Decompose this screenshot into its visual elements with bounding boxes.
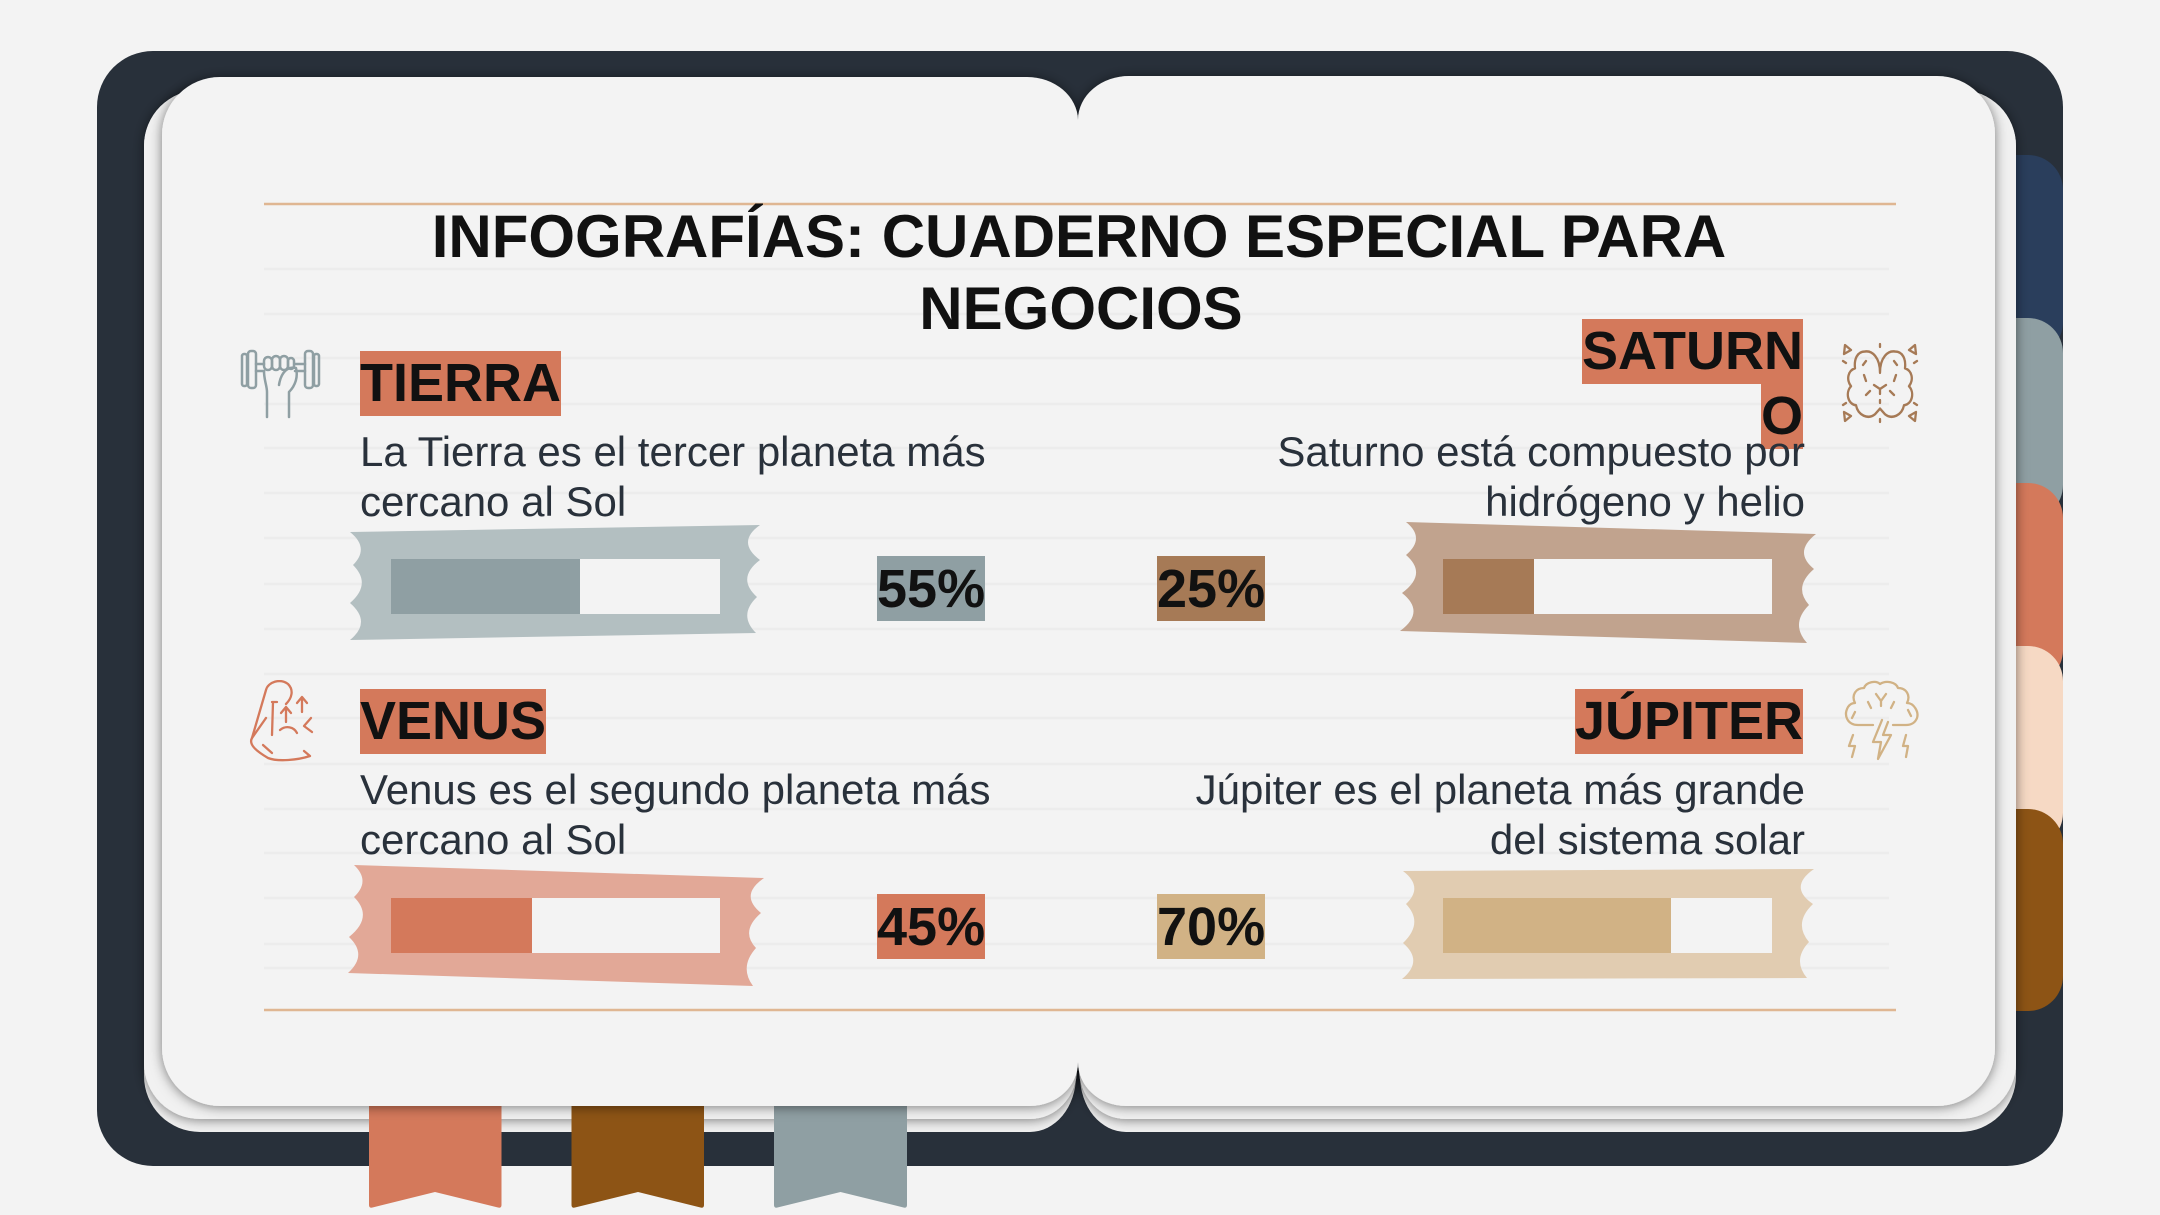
tape and progress bar: Venus 45% (250, 680, 764, 986)
middle page (144, 90, 2016, 1119)
title: INFOGRAFÍAS: CUADERNO ESPECIAL PARA NEGOCIOS (432, 203, 1726, 342)
back page (144, 90, 2016, 1132)
bookmarks (369, 1100, 907, 1208)
percentage: 25% (1157, 559, 1265, 619)
panel: Tierra (240, 350, 986, 640)
description: cercano al Sol (360, 478, 626, 525)
heading: TIERRA (360, 353, 561, 413)
percentage: 70% (1157, 897, 1265, 957)
description (1196, 766, 1805, 863)
tape and progress bar: Tierra 55% (240, 350, 760, 640)
section tabs (1980, 155, 2063, 1011)
description (1277, 428, 1805, 525)
description: cercano al Sol (360, 816, 626, 863)
percentage: 45% (877, 897, 985, 957)
description: Júpiter es el planeta más grande (1196, 766, 1805, 813)
panel: Júpiter (1157, 680, 1919, 979)
description: Venus es el segundo planeta más (360, 766, 990, 813)
tape and progress bar: Júpiter 70% (1402, 680, 1919, 979)
tape and progress bar: Saturno 25% (1400, 342, 1918, 643)
description: La Tierra es el tercer planeta más (360, 428, 986, 475)
description (360, 766, 990, 863)
description: hidrógeno y helio (1485, 478, 1805, 525)
spine wedge (1020, 60, 1136, 130)
description: del sistema solar (1490, 816, 1805, 863)
panel: Saturno (1157, 319, 1918, 643)
description: Saturno está compuesto por (1277, 428, 1805, 475)
description (360, 428, 986, 525)
percentage: 55% (877, 559, 985, 619)
heading: VENUS (360, 691, 546, 751)
front page (162, 76, 1995, 1106)
heading: SATURNO (1582, 321, 1803, 446)
heading: JÚPITER (1575, 691, 1803, 751)
panel: Venus (250, 680, 990, 986)
